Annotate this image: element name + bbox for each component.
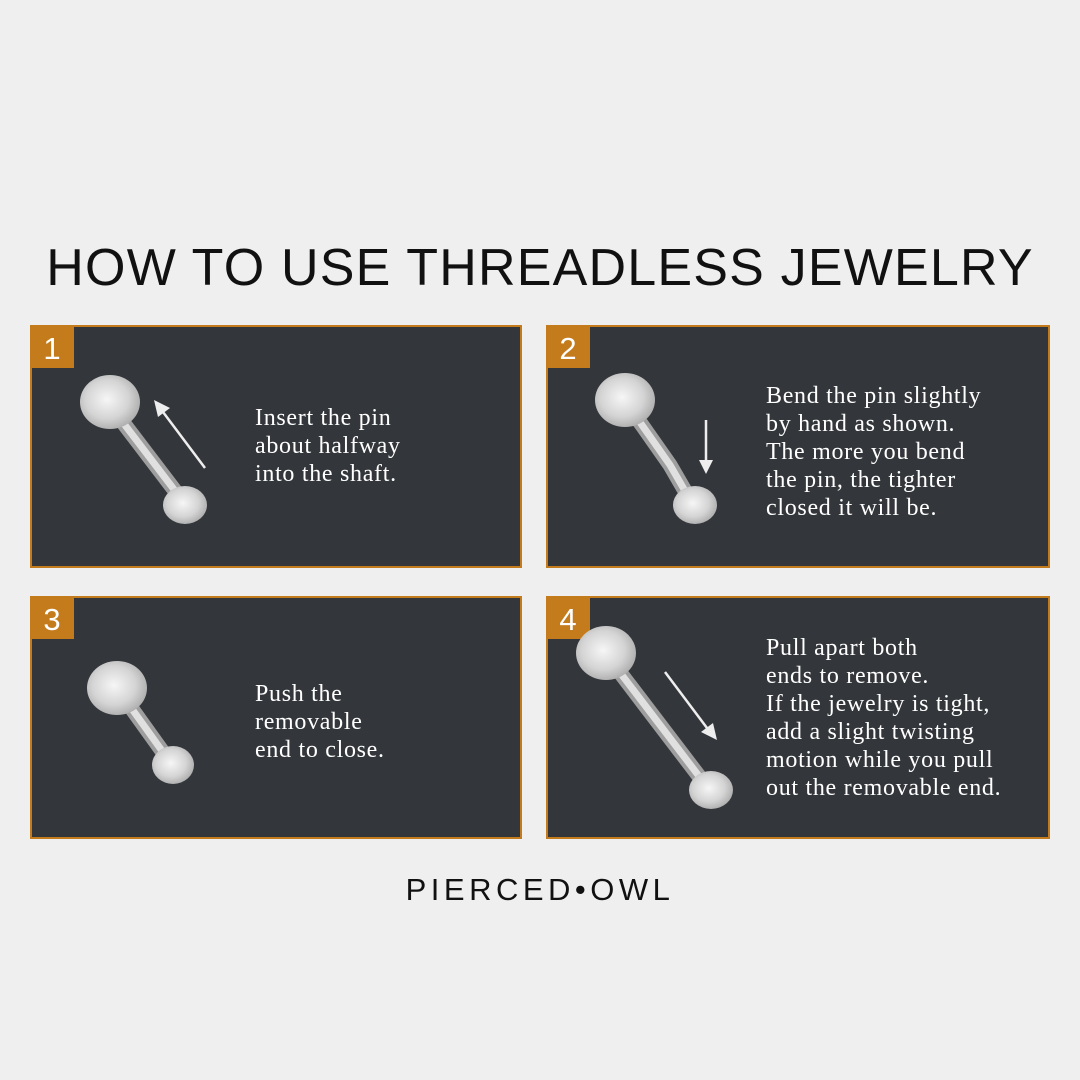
panel 2: 2 — [559, 331, 577, 366]
panel 2: Bend the pin slightly — [766, 383, 981, 409]
panel 1 — [30, 325, 521, 567]
panel 4: out the removable end. — [766, 775, 1001, 801]
panel 4 — [546, 596, 1049, 838]
panel 1: into the shaft. — [255, 461, 397, 487]
panel 2: The more you bend — [766, 439, 965, 465]
footer logo: PIERCED•OWL — [406, 872, 674, 907]
panel 1: 1 — [43, 331, 61, 366]
panel 3: 3 — [43, 602, 61, 637]
panel 1: Insert the pin — [255, 405, 391, 431]
panel 4: motion while you pull — [766, 747, 993, 773]
panel 3 — [30, 596, 521, 838]
panel 3: removable — [255, 709, 363, 735]
panel 4: 4 — [559, 602, 577, 637]
title: HOW TO USE THREADLESS JEWELRY — [46, 239, 1034, 297]
panel 1: about halfway — [255, 433, 401, 459]
panel 4: Pull apart both — [766, 635, 918, 661]
panel 4: If the jewelry is tight, — [766, 691, 990, 717]
panel 3: end to close. — [255, 737, 385, 763]
panel 4: add a slight twisting — [766, 719, 975, 745]
panel 2: the pin, the tighter — [766, 467, 956, 493]
panel 3: Push the — [255, 681, 343, 707]
panel 2: closed it will be. — [766, 495, 937, 521]
panel 4: ends to remove. — [766, 663, 929, 689]
panel 2 — [546, 325, 1049, 567]
panel 2: by hand as shown. — [766, 411, 955, 437]
